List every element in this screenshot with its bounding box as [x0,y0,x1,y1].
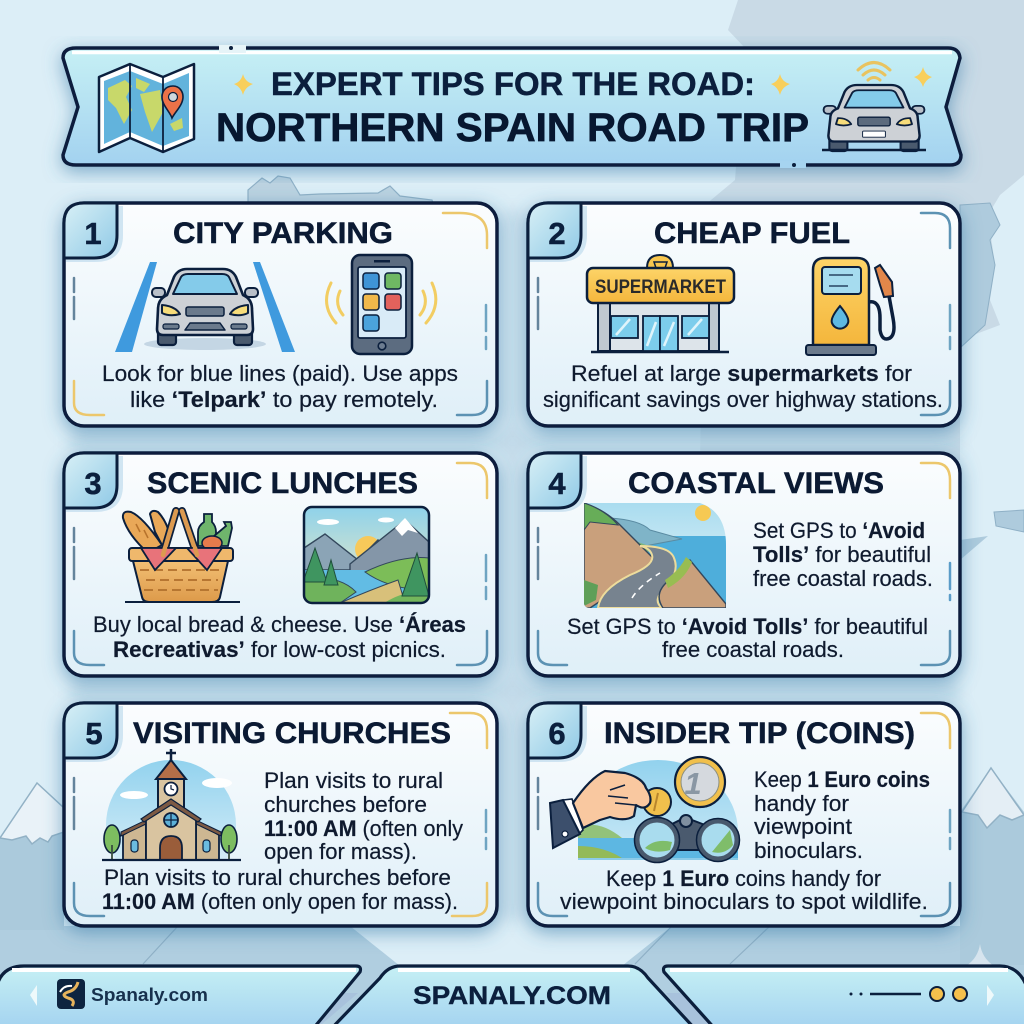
illustration: hand, coins and binoculars [548,756,740,864]
icon: folded map [99,64,194,152]
panel: 2 cheap fuel [528,203,960,426]
icon: parked car with blue lines [115,262,295,352]
text: coin side note: binoculars. [754,838,863,863]
heading: coastal views: COASTAL VIEWS [628,467,884,500]
text: coin side note: Keep 1 Euro coins [754,767,930,792]
panel: 5 visiting churches [64,703,497,926]
text: city parking [102,361,458,412]
text: coastal views [567,614,928,662]
text: coastal side note [753,518,933,591]
icon: sparkle car [914,67,932,87]
text: insider tip: viewpoint binoculars to spot wildlife. [560,889,928,914]
brand small: Spanaly.com [91,985,208,1005]
icon: banner car [824,85,924,151]
text: church side note: Plan visits to rural [264,768,443,793]
text: church side note: 11:00 AM (often only [264,816,463,841]
icon: church [102,749,241,862]
text: visiting churches [102,865,458,914]
footer dots and line [850,987,967,1001]
icon: sparkle right [771,74,790,95]
corner accents [74,463,487,665]
panel: 1 city parking [64,203,497,426]
number 1: 1 [84,216,102,251]
number 3: 3 [84,466,102,501]
text: church side note: churches before [264,792,427,817]
chevron right [987,985,994,1006]
number 2: 2 [548,216,566,251]
text: coastal side note: free coastal roads. [753,566,933,591]
text: coin side note [754,767,930,863]
text: scenic lunches [93,612,466,662]
corner accents [538,713,950,916]
text: church side note: open for mass). [264,839,417,864]
text: cheap fuel: Refuel at large supermarkets for [571,361,912,386]
illustration: hand, coins and binoculars: 1 [684,766,702,801]
icon: wifi signal [858,62,890,80]
banner car ground line [822,149,926,151]
icon: sparkle left [234,74,253,95]
icon: phone with apps [327,255,436,354]
panel: 6 insider tip coins [528,703,960,926]
text: coin side note: viewpoint [754,814,852,839]
text: city parking: Look for blue lines (paid). Use apps [102,361,458,386]
corner accents [538,463,950,665]
icon: supermarket: SUPERMARKET [595,277,726,298]
icon: mountain landscape [303,507,429,603]
panel: 4 coastal views [528,453,960,676]
text: scenic lunches: Recreativas’ for low-cost picnics. [113,637,446,662]
text: coastal views: Set GPS to ‘Avoid Tolls’ for beautiful [567,614,928,639]
footer center panel [330,966,696,1024]
text: insider tip [560,866,928,914]
text: insider tip: Keep 1 Euro coins handy for [606,866,881,891]
text: coastal side note: Set GPS to ‘Avoid [753,518,925,543]
heading: city parking: CITY PARKING [173,217,393,250]
heading line 1: EXPERT TIPS FOR THE ROAD: [271,66,755,102]
text: coin side note: handy for [754,791,849,816]
heading: cheap fuel: CHEAP FUEL [654,217,850,250]
text: scenic lunches: Buy local bread & cheese. Use ‘Áreas [93,612,466,637]
text: coastal side note: Tolls’ for beautiful [753,542,931,567]
icon: fuel pump [806,258,894,355]
title banner [63,45,961,168]
text: visiting churches: Plan visits to rural churches before [104,865,451,890]
icon: supermarket [587,255,734,352]
footer gap strips [308,993,716,1024]
number 5: 5 [85,716,103,751]
chevron left [30,985,37,1006]
icon: picnic basket [123,511,240,602]
illustration: coastal road [584,503,726,608]
number 6: 6 [548,716,566,751]
number 4: 4 [548,466,566,501]
logo [57,979,85,1009]
heading: scenic lunches: SCENIC LUNCHES [147,467,418,500]
heading line 2: NORTHERN SPAIN ROAD TRIP [216,106,809,150]
heading: insider tip: INSIDER TIP (COINS) [604,717,915,750]
text: visiting churches: 11:00 AM (often only open for mass). [102,889,458,914]
text: cheap fuel: significant savings over highway stations. [543,387,943,412]
text: coastal views: free coastal roads. [662,637,844,662]
panel: 3 scenic lunches [64,453,497,676]
corner accents [538,213,950,415]
corner accents [74,713,487,916]
text: cheap fuel [543,361,943,412]
corner accents [74,213,487,415]
text: city parking: like ‘Telpark’ to pay remotely. [130,387,438,412]
footer left panel [0,966,360,1024]
heading: visiting churches: VISITING CHURCHES [133,717,451,750]
footer right panel [664,966,1024,1024]
brand large: SPANALY.COM [413,982,611,1010]
text: church side note [264,768,463,864]
